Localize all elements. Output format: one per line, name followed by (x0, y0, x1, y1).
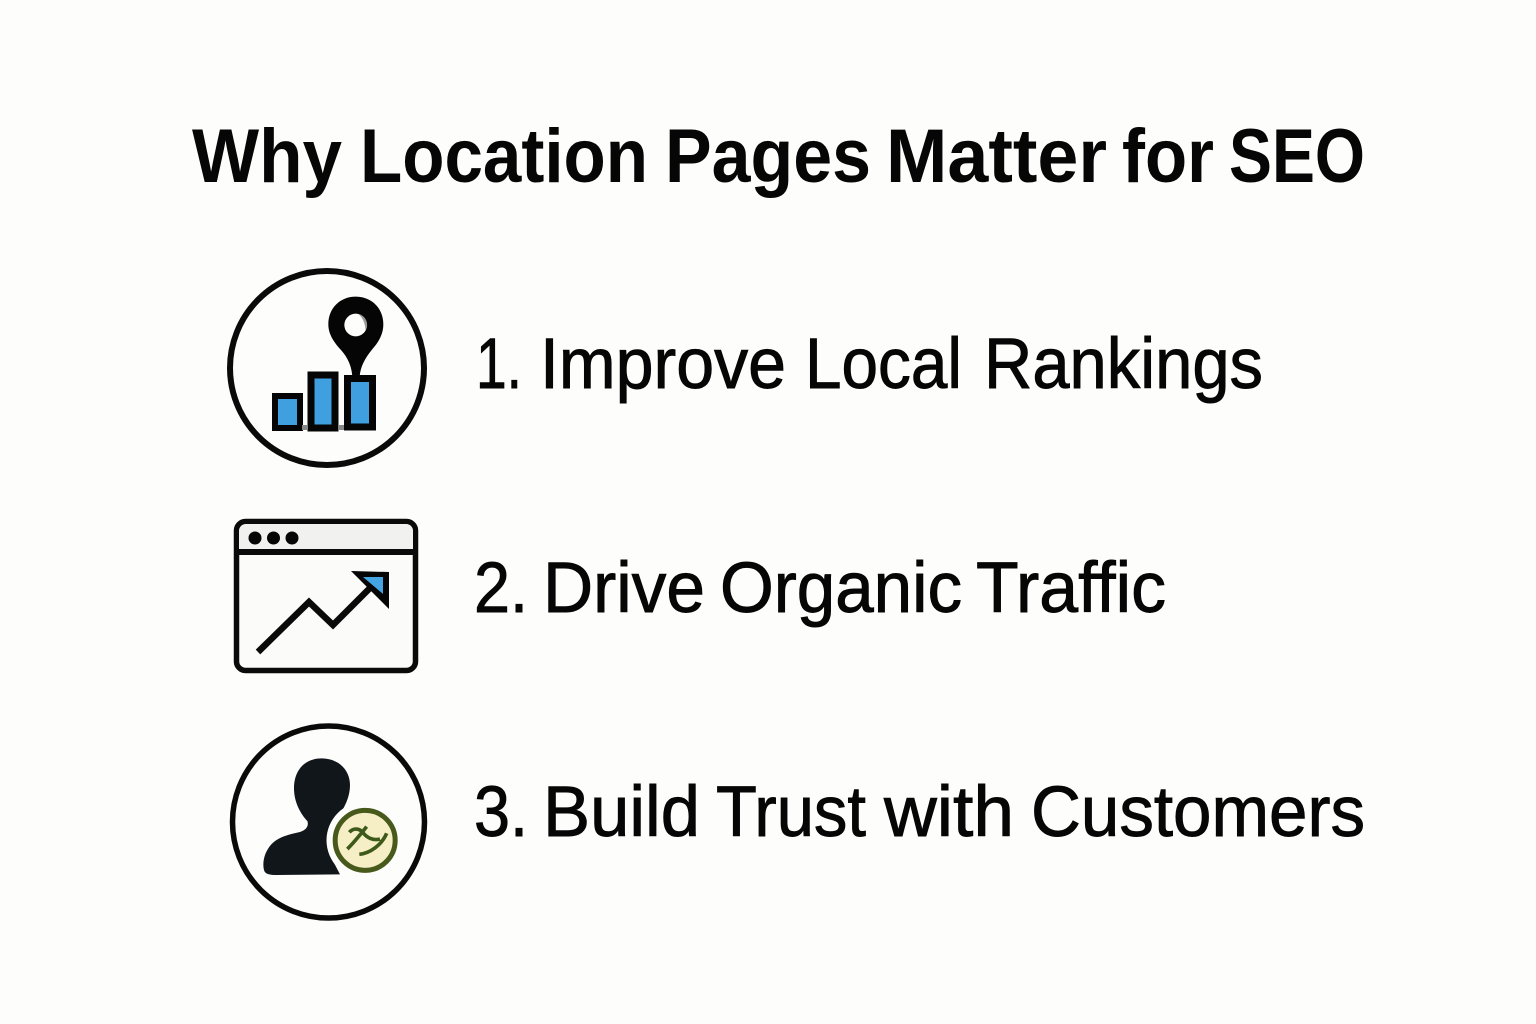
title: Location (360, 114, 648, 199)
label 3: Build (543, 773, 700, 852)
title: Matter (886, 114, 1107, 199)
title: Pages (665, 114, 871, 199)
label 3: Trust (716, 773, 866, 852)
list item 3: build trust with customers (232, 726, 1365, 918)
label 1: Rankings (984, 325, 1263, 404)
list item 2: drive organic traffic (236, 522, 1166, 670)
label 2: Traffic (976, 549, 1166, 628)
label 2: Organic (720, 549, 962, 628)
title: for (1122, 114, 1214, 199)
icon: location pin over bar chart in circle (230, 271, 424, 465)
title: SEO (1229, 114, 1365, 199)
title: Why (192, 114, 342, 199)
label 1: 1. (476, 325, 522, 404)
label 3: 3. (474, 773, 528, 852)
list item 1: improve local rankings (230, 271, 1263, 465)
icon: customer silhouette with coin in circle (232, 726, 424, 918)
label 1: Local (805, 325, 962, 404)
label 2: 2. (474, 549, 528, 628)
icon: browser window with rising arrow (236, 522, 416, 670)
label 3: with (883, 773, 1014, 852)
label 3: Customers (1031, 773, 1365, 852)
label 1: Improve (540, 325, 786, 404)
label 2: Drive (543, 549, 705, 628)
